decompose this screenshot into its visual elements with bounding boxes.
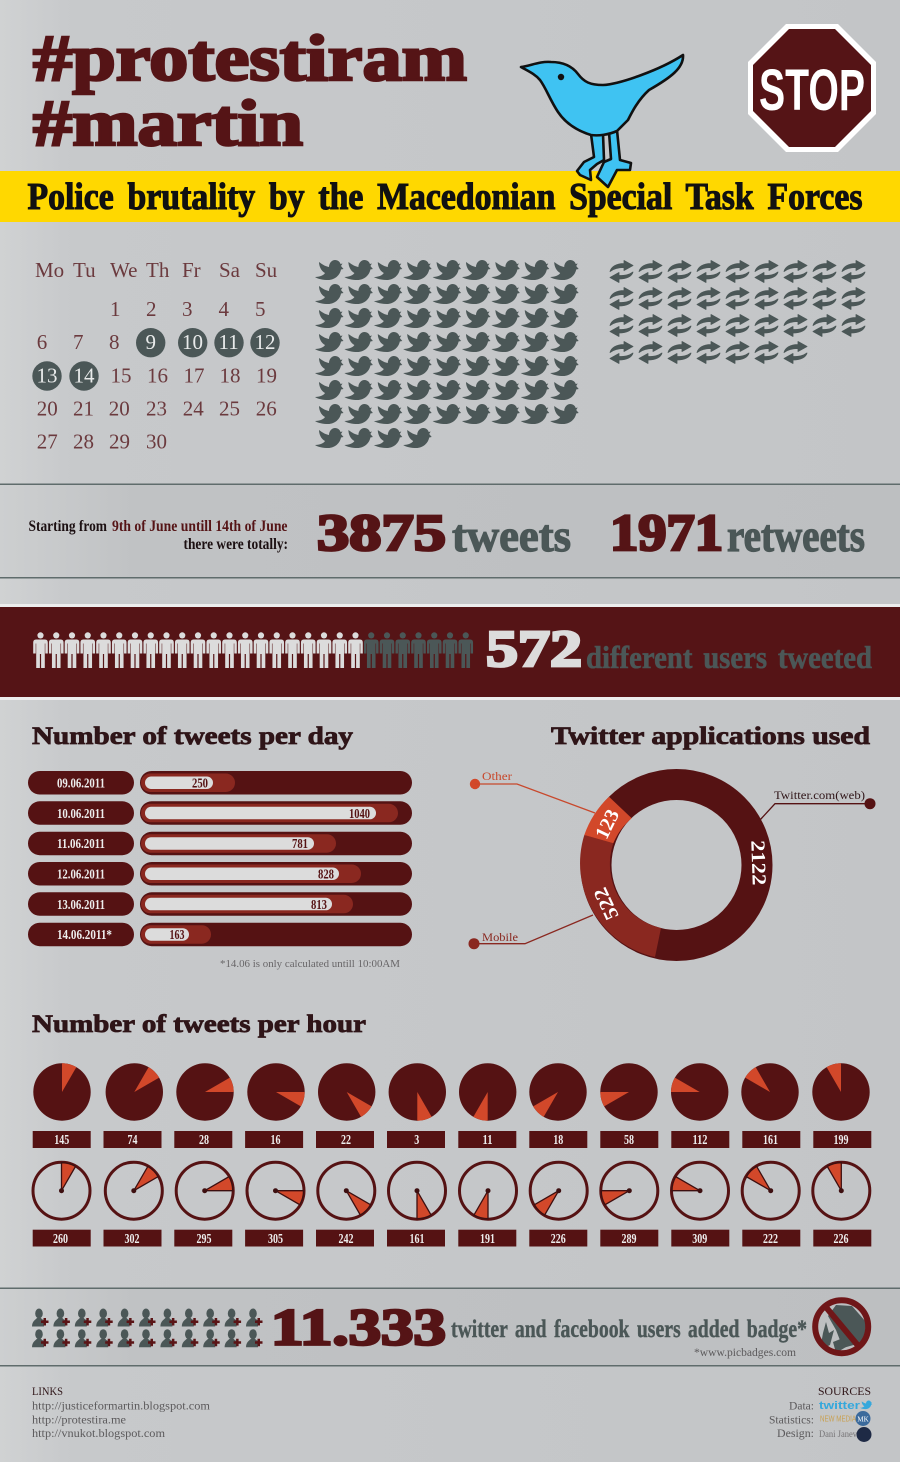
icon grid: tweets xyxy=(315,260,579,448)
value: mobile: 522 xyxy=(590,884,624,923)
period text: 9th of June untill 14th of June xyxy=(112,518,288,535)
labels: hourly values, first half xyxy=(33,1131,871,1148)
calendar: 25 xyxy=(219,397,240,421)
icon: no police badge xyxy=(815,1300,868,1353)
calendar: 21 xyxy=(73,397,94,421)
icon: blue bird xyxy=(521,55,683,187)
labels: hourly values, first half: 58 xyxy=(624,1133,634,1148)
labels: hourly values, first half: 74 xyxy=(128,1133,138,1148)
panel: totals band xyxy=(0,484,900,578)
logo: new media: MK xyxy=(857,1416,869,1424)
calendar: We xyxy=(110,258,137,282)
calendar: 4 xyxy=(218,297,230,321)
calendar: Th xyxy=(146,258,170,282)
callout: twitter web: Twitter.com(web) xyxy=(774,790,865,802)
badge total: 11.333 xyxy=(271,1300,446,1356)
calendar: 11 xyxy=(218,330,239,354)
tweets total: 3875 xyxy=(317,505,446,562)
calendar: 18 xyxy=(220,364,240,388)
bar 10.06: 1040 xyxy=(349,807,370,822)
labels: hourly values, second half: 260 xyxy=(53,1232,68,1247)
calendar xyxy=(32,258,280,454)
value: other: 123 xyxy=(591,806,624,843)
period text xyxy=(28,518,288,553)
retweets total: retweets xyxy=(727,510,865,561)
labels: hourly values, first half: 28 xyxy=(199,1133,209,1148)
bar 09.06: 250 xyxy=(192,776,208,792)
bar 09.06 xyxy=(28,771,412,794)
labels: hourly values, first half: 199 xyxy=(834,1133,848,1148)
callout: other xyxy=(470,771,595,813)
people icons xyxy=(33,632,473,668)
calendar: 10 xyxy=(182,330,203,354)
icon: stop sign xyxy=(748,24,876,152)
calendar: 27 xyxy=(37,430,58,454)
heading: tweets per day: Number of tweets per day xyxy=(32,723,354,750)
title: #martin xyxy=(33,87,303,160)
bar 10.06 xyxy=(28,801,412,825)
calendar: 8 xyxy=(109,330,120,354)
calendar: 16 xyxy=(147,364,168,388)
bar 13.06: 813 xyxy=(311,898,327,913)
calendar: Mo xyxy=(35,258,64,282)
panel: users band xyxy=(0,604,900,700)
period text: there were totally: xyxy=(184,536,288,553)
badge source: *www.picbadges.com xyxy=(694,1347,796,1359)
links: http://justiceformartin.blogspot.com xyxy=(32,1398,211,1412)
labels: hourly values, second half: 309 xyxy=(692,1232,707,1247)
bar 14.06: 14.06.2011* xyxy=(57,928,112,943)
labels: hourly values, first half: 145 xyxy=(54,1133,69,1148)
callout: mobile xyxy=(468,915,593,949)
calendar: Sa xyxy=(219,258,241,282)
labels: hourly values, second half: 226 xyxy=(834,1232,848,1247)
retweets total: 1971 xyxy=(610,505,723,562)
bar 09.06: 09.06.2011 xyxy=(57,776,105,792)
retweets total xyxy=(610,505,865,562)
sources: Data: xyxy=(789,1398,814,1412)
period text: Starting from xyxy=(28,518,108,535)
badge caption: twitter and facebook users added badge* xyxy=(451,1316,807,1343)
calendar: 19 xyxy=(256,364,277,388)
bar 11.06: 781 xyxy=(292,837,308,852)
sources: Statistics: xyxy=(769,1412,814,1426)
calendar: Fr xyxy=(182,258,201,282)
heading: applications: Twitter applications used xyxy=(551,723,870,750)
calendar: 12 xyxy=(254,330,276,354)
bar 13.06: 13.06.2011 xyxy=(57,898,105,913)
calendar: 3 xyxy=(182,297,192,321)
links: http://vnukot.blogspot.com xyxy=(32,1426,166,1440)
labels: hourly values, first half: 11 xyxy=(482,1133,492,1148)
calendar: 28 xyxy=(73,430,94,454)
users caption: different users tweeted xyxy=(586,639,872,675)
heading: tweets per hour: Number of tweets per hour xyxy=(32,1011,366,1038)
logo: twitter: twitter xyxy=(819,1400,861,1412)
value: web: 2122 xyxy=(746,840,770,886)
labels: hourly values, second half: 226 xyxy=(551,1232,566,1247)
sources: Design: xyxy=(777,1426,814,1440)
callout: twitter web xyxy=(760,790,876,820)
labels: hourly values, first half: 22 xyxy=(341,1133,351,1148)
icon grid: retweets xyxy=(610,260,865,364)
labels: hourly values, second half: 305 xyxy=(268,1232,283,1247)
calendar: 15 xyxy=(110,364,132,388)
calendar: 5 xyxy=(255,297,266,321)
links: http://protestira.me xyxy=(32,1412,126,1426)
labels: hourly values, second half: 289 xyxy=(622,1232,636,1247)
tweets total xyxy=(317,505,571,562)
labels: hourly values, first half: 3 xyxy=(414,1133,419,1148)
calendar: 30 xyxy=(146,430,167,454)
calendar: 9 xyxy=(146,330,156,354)
labels: hourly values, first half: 18 xyxy=(553,1133,563,1148)
users total: 572 xyxy=(486,621,582,678)
calendar: 24 xyxy=(183,397,204,421)
labels: hourly values, first half: 161 xyxy=(763,1133,778,1148)
bar 10.06: 10.06.2011 xyxy=(57,807,105,822)
bar 11.06 xyxy=(28,832,412,855)
bar 11.06: 11.06.2011 xyxy=(57,837,105,852)
labels: hourly values, second half: 191 xyxy=(480,1232,495,1247)
bar 12.06: 12.06.2011 xyxy=(57,868,105,882)
calendar: 13 xyxy=(36,364,58,388)
chart: hourly clocks, second half xyxy=(33,1159,870,1222)
calendar: 2 xyxy=(146,297,156,321)
bar 14.06: 163 xyxy=(170,928,184,943)
logo: designer: Dani Janev xyxy=(819,1429,857,1439)
footnote: *14.06 is only calculated untill 10:00AM xyxy=(220,958,400,970)
bar chart: tweets per day xyxy=(28,771,412,946)
bar 12.06 xyxy=(28,862,412,886)
labels: hourly values, second half: 302 xyxy=(124,1232,140,1247)
panel: badge band xyxy=(0,1288,900,1366)
labels: hourly values, second half: 295 xyxy=(196,1232,212,1247)
donut chart: applications xyxy=(580,784,770,957)
labels: hourly values, second half: 242 xyxy=(338,1232,354,1247)
chart: hourly pies, first half xyxy=(33,1060,870,1124)
callout: mobile: Mobile xyxy=(482,932,518,944)
calendar: 20 xyxy=(109,397,130,421)
logo: new media: NEW MEDIA xyxy=(820,1414,857,1424)
calendar: 7 xyxy=(73,330,84,354)
bar 14.06 xyxy=(28,923,412,946)
sources: SOURCES xyxy=(818,1386,871,1398)
calendar: 20 xyxy=(37,397,58,421)
bar 13.06 xyxy=(28,892,412,916)
calendar: Tu xyxy=(73,258,96,282)
labels: hourly values, first half: 112 xyxy=(692,1133,708,1148)
calendar: 26 xyxy=(256,397,277,421)
calendar: 6 xyxy=(37,330,47,354)
calendar: Su xyxy=(255,258,278,282)
labels: hourly values, second half: 161 xyxy=(410,1232,424,1247)
logo: new media xyxy=(820,1411,870,1426)
callout: other: Other xyxy=(482,771,512,783)
title: #protestiram xyxy=(33,22,467,95)
links: LINKS xyxy=(32,1386,63,1398)
labels: hourly values, second half: 222 xyxy=(763,1232,778,1247)
bar 12.06: 828 xyxy=(318,868,334,882)
labels: hourly values, second half xyxy=(33,1230,871,1247)
tweets total: tweets xyxy=(452,510,571,561)
calendar: 23 xyxy=(146,397,167,421)
calendar: 1 xyxy=(110,297,120,321)
calendar: 29 xyxy=(109,430,130,454)
calendar: 14 xyxy=(74,364,95,388)
title xyxy=(33,22,467,160)
links xyxy=(32,1386,211,1440)
labels: hourly values, first half: 16 xyxy=(270,1133,280,1148)
icon grid: added users xyxy=(32,1308,262,1347)
sources xyxy=(769,1386,872,1442)
calendar: 17 xyxy=(184,364,204,388)
